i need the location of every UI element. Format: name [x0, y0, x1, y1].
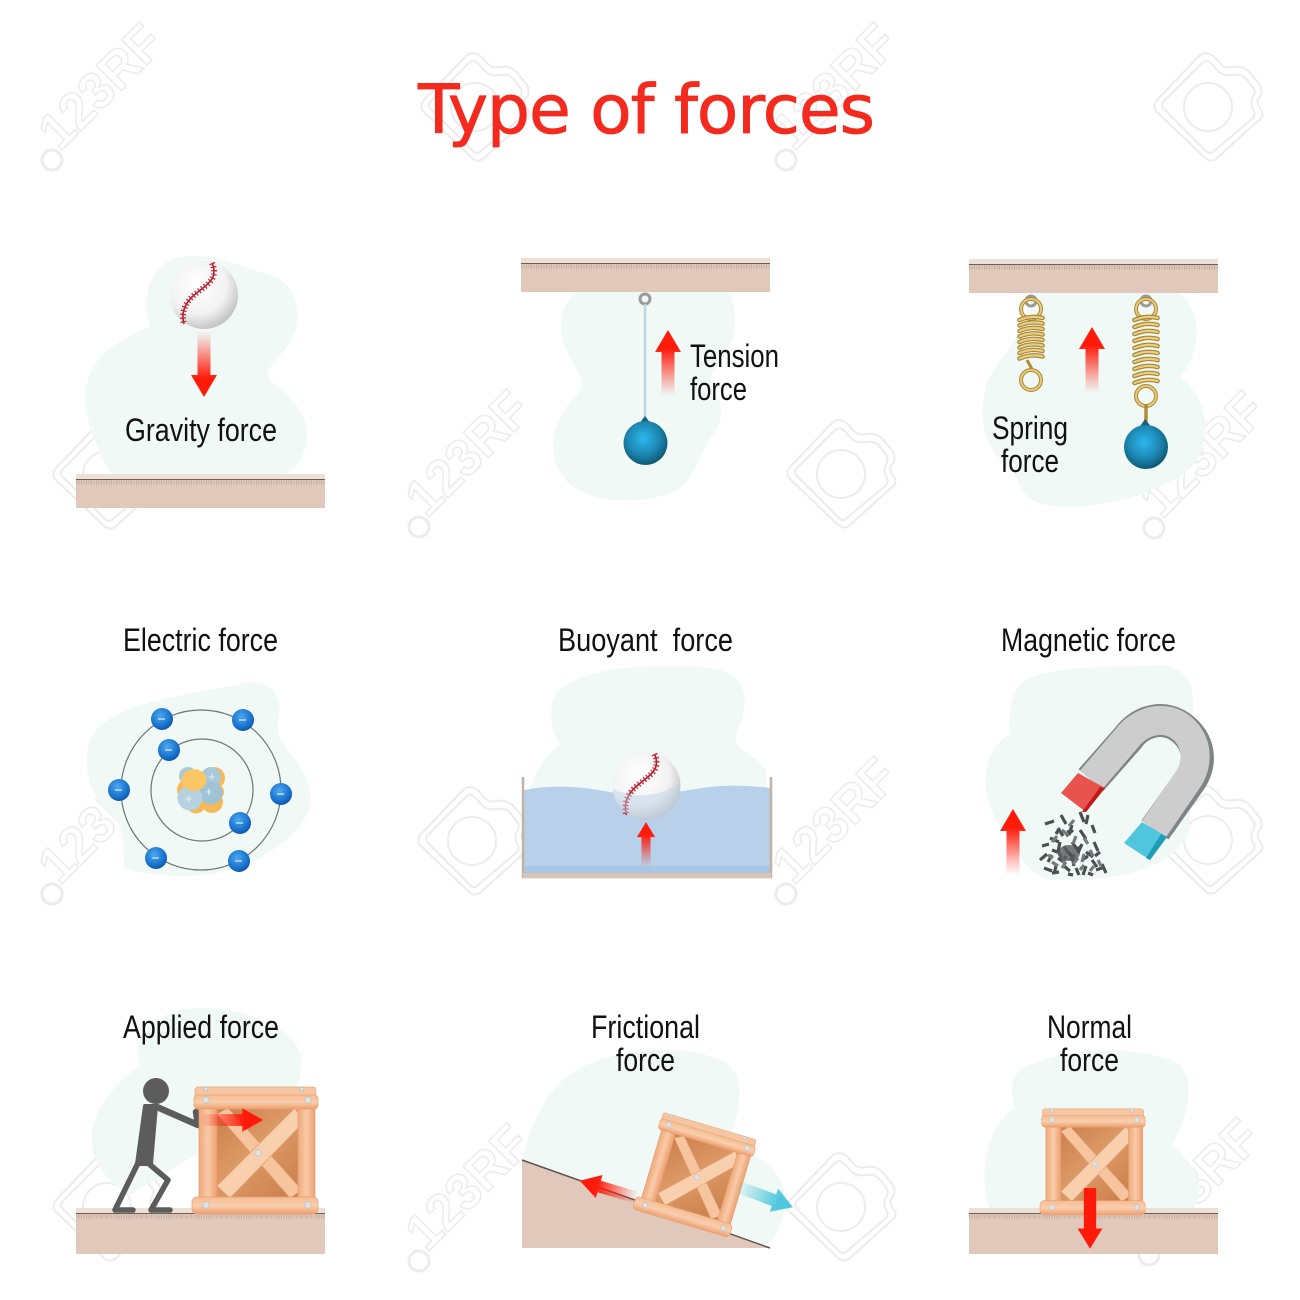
horseshoe magnet	[1061, 720, 1197, 860]
arrow up	[637, 822, 655, 867]
arrow up	[1000, 809, 1026, 875]
arrow right	[200, 1108, 263, 1132]
pushing figure	[115, 1078, 198, 1210]
nucleus: +	[205, 784, 213, 799]
ceiling	[521, 258, 770, 292]
electrons	[108, 708, 292, 872]
panel: electric force	[87, 622, 310, 876]
title: Type of forces	[417, 71, 875, 150]
water	[524, 786, 770, 874]
label	[992, 410, 1068, 479]
label: force	[690, 371, 747, 407]
background blob	[85, 256, 307, 476]
ground	[969, 1208, 1218, 1254]
hanging ball	[624, 416, 668, 465]
orbits	[121, 710, 281, 870]
background blob	[92, 1008, 301, 1195]
panel: magnetic force	[986, 622, 1197, 880]
blue arrow	[732, 1174, 797, 1219]
red arrow	[576, 1169, 641, 1209]
panel: frictional force	[522, 1009, 797, 1248]
label: Frictional	[591, 1009, 700, 1045]
left spring	[1020, 296, 1042, 390]
panel: tension force	[521, 258, 779, 501]
crate on slope	[632, 1112, 758, 1238]
label: force	[1001, 443, 1059, 479]
label: Magnetic force	[1001, 622, 1176, 658]
background blob	[87, 682, 310, 876]
label: Buoyant force	[558, 622, 733, 658]
background blob	[984, 1051, 1199, 1210]
electron minus signs	[115, 719, 284, 861]
background blob	[982, 293, 1205, 507]
label: Electric force	[123, 622, 278, 658]
ceiling	[969, 259, 1218, 293]
ground	[76, 1208, 325, 1254]
iron filings	[1040, 812, 1106, 875]
background blob	[522, 1050, 785, 1248]
label	[690, 338, 779, 407]
arrow up	[1079, 327, 1105, 393]
label: force	[616, 1042, 675, 1078]
crate	[1040, 1109, 1145, 1215]
baseball	[170, 261, 238, 329]
arrow down	[191, 331, 217, 397]
arrow up	[655, 330, 681, 396]
nucleus	[177, 767, 225, 814]
label: force	[1060, 1042, 1119, 1078]
ground	[76, 474, 325, 508]
label: Spring	[992, 410, 1068, 446]
panel: gravity force	[76, 256, 325, 508]
rope and hook	[640, 294, 650, 420]
label: Applied force	[123, 1009, 279, 1045]
nucleus: +	[185, 791, 193, 806]
ball	[612, 752, 680, 820]
label: Gravity force	[125, 412, 277, 448]
crate	[192, 1087, 318, 1214]
slope	[522, 1160, 770, 1248]
panel: buoyant force	[523, 622, 771, 878]
panel: applied force	[76, 1008, 325, 1254]
panel: normal force	[969, 1009, 1218, 1254]
label	[591, 1009, 700, 1078]
panel: spring force	[969, 259, 1218, 507]
water floor and tank	[523, 777, 771, 878]
background blob	[525, 666, 766, 866]
label: Normal	[1047, 1009, 1132, 1045]
nucleus: +	[208, 769, 216, 784]
right spring with ball	[1124, 296, 1168, 469]
background blob	[553, 292, 735, 501]
label	[1047, 1009, 1132, 1078]
arrow down	[1078, 1188, 1102, 1249]
label: Tension	[690, 338, 779, 374]
background blob	[986, 665, 1194, 880]
